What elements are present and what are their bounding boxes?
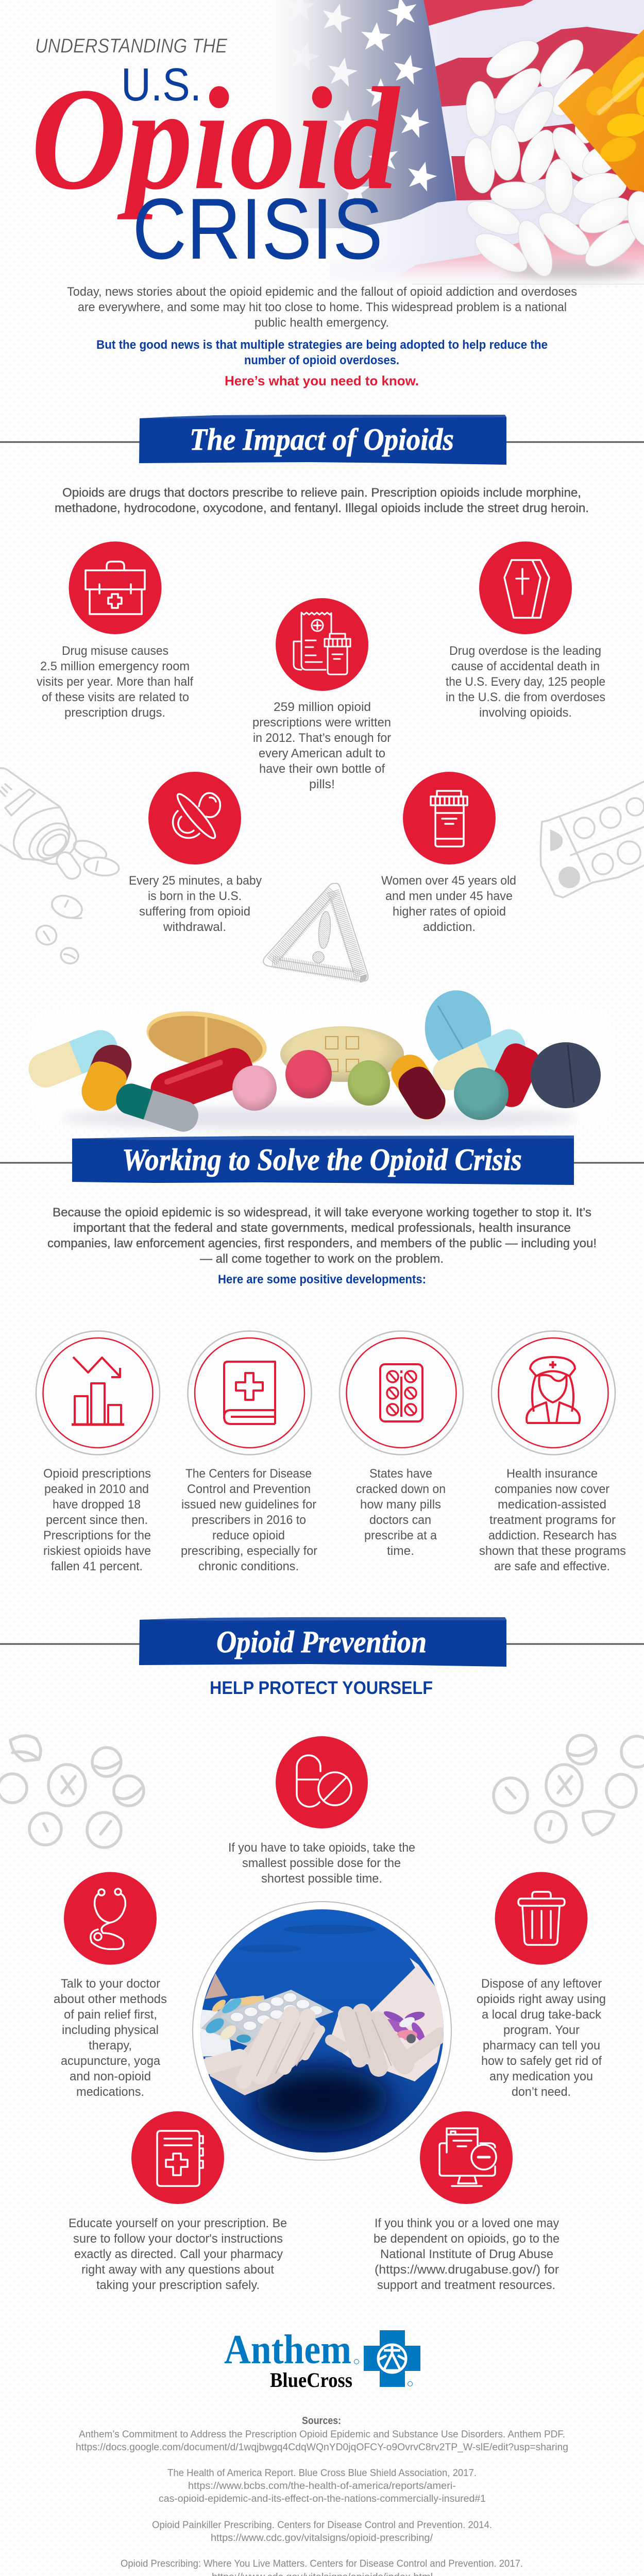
- text: insurance coverage: Health insurance: [506, 1467, 598, 1481]
- subheading: help protect yourself: HELP PROTECT YOURSELF: [210, 1678, 433, 1698]
- text: state limits: prescribe at a: [364, 1529, 437, 1543]
- intro text: number of opioid overdoses.: [244, 353, 399, 367]
- tip: smallest dose: [228, 1736, 415, 1886]
- blue tablet: [420, 986, 496, 1074]
- text: overdose deaths: involving opioids.: [479, 706, 572, 720]
- text: dependence resources: If you think you or a loved one may: [375, 2216, 559, 2230]
- sources: [36, 2415, 607, 2576]
- text: state limits: States have: [369, 1467, 432, 1481]
- sources: Opioid Prescribing: Where You Live Matters. Centers for Disease Control and Prevention. 2017.: [121, 2558, 523, 2569]
- text: babies born in withdrawal: suffering from opioid: [139, 905, 250, 919]
- text: CDC guidelines: The Centers for Disease: [185, 1467, 312, 1481]
- development: state limits: [340, 1331, 463, 1558]
- text: dispose of leftovers: a local drug take-back: [482, 2008, 602, 2022]
- text: talk to your doctor: about other methods: [54, 1992, 167, 2006]
- section banner: working to solve: Working to Solve the Opioid Crisis: [122, 1143, 522, 1177]
- text: age groups: [381, 874, 516, 934]
- tip: talk to your doctor: [54, 1872, 167, 2099]
- centre photo: gloved hands holding pills: [193, 1902, 451, 2160]
- text: dependence resources: National Institute of Drug Abuse: [380, 2247, 553, 2261]
- text: dependence resources: be dependent on opioids, go to the: [374, 2232, 560, 2246]
- text: prescriptions written: 259 million opioid: [274, 700, 371, 714]
- tip: dispose of leftovers: [477, 1872, 606, 2099]
- text: insurance coverage: addiction. Research has: [488, 1529, 617, 1543]
- text: dispose of leftovers: [477, 1977, 606, 2099]
- icon: prescription and bottle: [276, 598, 368, 691]
- text: prescriptions written: [252, 700, 391, 791]
- tip: educate yourself: [69, 2111, 287, 2292]
- text: overdose deaths: cause of accidental death in: [451, 659, 600, 673]
- stat: overdose deaths: [446, 541, 605, 720]
- text: educate yourself: [69, 2216, 287, 2292]
- maroon and yellow capsule: [76, 1039, 138, 1116]
- text: talk to your doctor: including physical: [62, 2023, 159, 2037]
- intro text: Today, news stories about the opioid epidemic and the fallout of opioid addiction and overdoses: [67, 285, 577, 299]
- doodle: spilled pill bottle: [0, 768, 120, 965]
- text: state limits: doctors can: [369, 1513, 431, 1527]
- title line: CRISIS: CRISIS: [132, 180, 383, 277]
- impact intro text: methadone, hydrocodone, oxycodone, and fentanyl. Illegal opioids include the street drug heroin.: [55, 501, 589, 515]
- solve intro text: Because the opioid epidemic is so widespread, it will take everyone working together to stop it. It’s: [53, 1206, 591, 1219]
- solve intro text: companies, law enforcement agencies, first responders, and members of the public — including you!: [47, 1236, 597, 1250]
- big tan tablet: [142, 1003, 271, 1077]
- text: babies born in withdrawal: withdrawal.: [163, 920, 226, 934]
- text: talk to your doctor: of pain relief first,: [64, 2008, 157, 2022]
- text: prescriptions written: pills!: [309, 777, 335, 791]
- intro text: But the good news is that multiple strategies are being adopted to help reduce the: [96, 338, 548, 352]
- text: prescriptions dropped: percent since then.: [46, 1513, 148, 1527]
- sources: The Health of America Report. Blue Cross Blue Shield Association, 2017.: [167, 2468, 477, 2479]
- text: prescriptions dropped: riskiest opioids have: [43, 1544, 151, 1558]
- text: prescriptions written: in 2012. That’s enough for: [253, 731, 391, 745]
- sources: Anthem’s Commitment to Address the Prescription Opioid Epidemic and Substance Use Disorders. Anthem PDF.: [79, 2429, 565, 2440]
- icon: stethoscope: [64, 1872, 157, 1965]
- section banner: the impact of opioids: [0, 415, 644, 465]
- section banner: opioid prevention: [0, 1617, 644, 1667]
- blister pack, front: [230, 1990, 334, 2039]
- text: dispose of leftovers: any medication you: [489, 2070, 593, 2083]
- sources: Opioid Painkiller Prescribing. Centers for Disease Control and Prevention. 2014.: [152, 2520, 492, 2531]
- logo: Anthem Blue Cross: BlueCross: [270, 2368, 352, 2392]
- text: CDC guidelines: reduce opioid: [212, 1529, 285, 1543]
- text: CDC guidelines: chronic conditions.: [198, 1560, 299, 1573]
- icon: falling bar chart: [36, 1331, 160, 1455]
- text: educate yourself: exactly as directed. Call your pharmacy: [74, 2247, 283, 2261]
- text: insurance coverage: companies now cover: [495, 1482, 609, 1496]
- intro text: Here’s what you need to know.: [225, 373, 419, 388]
- text: dependence resources: (https://www.drugabuse.gov/) for: [375, 2263, 559, 2277]
- text: prescriptions written: every American adult to: [259, 747, 385, 760]
- icon: pacifier: [148, 772, 241, 865]
- icon: capsule and tablet: [276, 1736, 368, 1828]
- blister pack, back: [201, 1994, 268, 2047]
- stat: age groups: [381, 772, 516, 934]
- tip: dependence resources: [374, 2111, 560, 2292]
- text: educate yourself: right away with any questions about: [81, 2263, 274, 2277]
- solve intro text: — all come together to work on the problem.: [200, 1252, 444, 1266]
- teal and grey capsule: [112, 1080, 202, 1136]
- title: [31, 35, 401, 277]
- text: CDC guidelines: prescribers in 2016 to: [192, 1513, 306, 1527]
- icon: pill bottle: [403, 772, 496, 865]
- text: talk to your doctor: therapy,: [89, 2039, 132, 2053]
- text: overdose deaths: [446, 644, 605, 720]
- text: insurance coverage: treatment programs for: [489, 1513, 616, 1527]
- cream and cyan capsule, right: [428, 1024, 531, 1095]
- text: age groups: Women over 45 years old: [381, 874, 516, 888]
- sources: Sources:: [302, 2415, 341, 2427]
- stat: drug misuse: [37, 541, 193, 720]
- text: talk to your doctor: and non-opioid: [70, 2070, 151, 2083]
- text: state limits: time.: [387, 1544, 414, 1558]
- text: talk to your doctor: medications.: [76, 2085, 144, 2099]
- text: drug misuse: of these visits are related to: [42, 690, 189, 704]
- stat: babies born in withdrawal: [129, 772, 262, 934]
- cream and cyan capsule, left: [24, 1025, 123, 1092]
- yellow and maroon capsule: [385, 1048, 452, 1126]
- development: CDC guidelines: [181, 1331, 317, 1573]
- text: state limits: cracked down on: [356, 1482, 446, 1496]
- solve intro text: Here are some positive developments:: [218, 1273, 426, 1286]
- intro text: [67, 285, 577, 388]
- text: drug misuse: 2.5 million emergency room: [40, 659, 190, 673]
- text: dispose of leftovers: opioids right away using: [477, 1992, 606, 2006]
- text: smallest dose: If you have to take opioids, take the: [228, 1841, 415, 1855]
- text: insurance coverage: are safe and effective.: [494, 1560, 610, 1573]
- logo: Anthem Blue Cross: [224, 2327, 420, 2392]
- intro text: public health emergency.: [255, 316, 389, 330]
- text: state limits: how many pills: [360, 1498, 441, 1512]
- text: babies born in withdrawal: is born in the U.S.: [148, 889, 242, 903]
- doodle: warning triangle: [263, 884, 368, 981]
- text: dependence resources: support and treatment resources.: [377, 2278, 555, 2292]
- text: drug misuse: visits per year. More than half: [37, 675, 193, 689]
- icon: medical book: [188, 1331, 311, 1455]
- text: drug misuse: [37, 644, 193, 720]
- sources: https://www.bcbs.com/the-health-of-america/reports/ameri-: [188, 2481, 456, 2492]
- text: babies born in withdrawal: [129, 874, 262, 934]
- text: educate yourself: Educate yourself on your prescription. Be: [69, 2216, 287, 2230]
- text: dispose of leftovers: program. Your: [503, 2023, 580, 2037]
- impact intro text: Opioids are drugs that doctors prescribe to relieve pain. Prescription opioids include morphine,: [62, 486, 581, 500]
- orange prescription bottle: [558, 29, 644, 192]
- text: state limits: [356, 1467, 446, 1558]
- text: dispose of leftovers: don’t need.: [512, 2085, 571, 2099]
- right gloved hand: [329, 1964, 444, 2081]
- solve intro text: important that the federal and state governments, medical professionals, health insurance: [73, 1221, 571, 1235]
- text: prescriptions dropped: Opioid prescriptions: [43, 1467, 151, 1481]
- text: CDC guidelines: Control and Prevention: [187, 1482, 311, 1496]
- cream tablet: [280, 1026, 404, 1082]
- development: insurance coverage: [479, 1331, 626, 1573]
- text: CDC guidelines: prescribing, especially for: [181, 1544, 317, 1558]
- text: dispose of leftovers: how to safely get rid of: [481, 2054, 602, 2068]
- header photo: flag and spilled pills: [273, 0, 644, 284]
- section banner: the impact of opioids: The Impact of Opioids: [190, 422, 454, 456]
- text: smallest dose: smallest possible dose for the: [242, 1856, 401, 1870]
- text: CDC guidelines: issued new guidelines for: [181, 1498, 316, 1512]
- icon: coffin: [479, 541, 572, 634]
- white oval pills: [462, 33, 644, 281]
- title line: Opioid: Opioid: [31, 57, 401, 220]
- pink tablet: [232, 1065, 277, 1111]
- text: talk to your doctor: Talk to your doctor: [61, 1977, 160, 1991]
- photo: assorted colourful pills: [24, 986, 613, 1136]
- development: prescriptions dropped: [36, 1331, 160, 1573]
- sources: https://www.cdc.gov/vitalsigns/opioid-prescribing/: [211, 2533, 433, 2544]
- text: prescriptions dropped: Prescriptions for the: [43, 1529, 151, 1543]
- icon: prescription notes with cross: [131, 2111, 224, 2204]
- logo: Anthem Blue Cross: Anthem: [224, 2327, 351, 2372]
- text: insurance coverage: [479, 1467, 626, 1573]
- text: age groups: higher rates of opioid: [393, 905, 506, 919]
- sources: cas-opioid-epidemic-and-its-effect-on-the-nations-commercially-insured#1: [159, 2494, 486, 2504]
- intro text: are everywhere, and some may hit too close to home. This widespread problem is a national: [78, 300, 567, 314]
- text: smallest dose: shortest possible time.: [261, 1872, 382, 1886]
- text: drug misuse: prescription drugs.: [64, 706, 165, 720]
- left gloved hand: [205, 2011, 324, 2095]
- text: insurance coverage: shown that these programs: [479, 1544, 626, 1558]
- text: prescriptions written: prescriptions were written: [252, 716, 391, 730]
- section banner: opioid prevention: Opioid Prevention: [216, 1625, 427, 1659]
- solve intro text: [47, 1206, 597, 1286]
- text: insurance coverage: medication-assisted: [498, 1498, 606, 1512]
- title line: understanding the: UNDERSTANDING THE: [35, 35, 228, 57]
- icon: blister pack: [340, 1331, 463, 1455]
- text: overdose deaths: the U.S. Every day, 125 people: [446, 675, 605, 689]
- title line: U.S.: U.S.: [121, 59, 201, 111]
- text: educate yourself: taking your prescription safely.: [96, 2278, 260, 2292]
- stat: prescriptions written: [252, 598, 391, 791]
- sources: https://docs.google.com/document/d/1wqjbwgq4CdqWQnYD0jqOFCY-o9OvrvC8rv2TP_W-slE/edit?usp=sharing: [76, 2442, 568, 2453]
- text: dispose of leftovers: Dispose of any leftover: [481, 1977, 602, 1991]
- red capsule: [146, 1043, 258, 1117]
- icon: computer with document: [420, 2111, 513, 2204]
- coral tablet: [285, 1050, 332, 1098]
- text: age groups: addiction.: [423, 920, 476, 934]
- text: CDC guidelines: [181, 1467, 317, 1573]
- text: drug misuse: Drug misuse causes: [62, 644, 168, 658]
- section banner: working to solve: [0, 1136, 644, 1185]
- text: prescriptions dropped: fallen 41 percent.: [51, 1560, 143, 1573]
- text: talk to your doctor: acupuncture, yoga: [61, 2054, 161, 2068]
- doodle: scattered pills, left: [0, 1736, 144, 1848]
- text: dependence resources: [374, 2216, 560, 2292]
- doodle: blister pack: [540, 782, 644, 897]
- icon: medical briefcase: [69, 541, 162, 634]
- icon: trash can: [495, 1872, 587, 1965]
- text: overdose deaths: in the U.S. die from overdoses: [446, 690, 605, 704]
- red capsule, right: [483, 1039, 544, 1111]
- impact intro text: [55, 486, 589, 515]
- text: prescriptions written: have their own bottle of: [259, 762, 385, 776]
- text: age groups: and men under 45 have: [385, 889, 513, 903]
- text: talk to your doctor: [54, 1977, 167, 2099]
- doodle: scattered pills, right: [494, 1735, 644, 1842]
- text: educate yourself: sure to follow your doctor's instructions: [73, 2232, 283, 2246]
- text: prescriptions dropped: [43, 1467, 151, 1573]
- handful of capsules: [383, 2011, 425, 2044]
- text: prescriptions dropped: peaked in 2010 and: [44, 1482, 149, 1496]
- text: dispose of leftovers: pharmacy can tell you: [483, 2039, 600, 2053]
- text: prescriptions dropped: have dropped 18: [53, 1498, 141, 1512]
- text: overdose deaths: Drug overdose is the leading: [449, 644, 601, 658]
- icon: nurse: [492, 1331, 615, 1455]
- green tablet: [348, 1060, 390, 1106]
- teal tablet: [454, 1067, 509, 1120]
- text: smallest dose: [228, 1841, 415, 1886]
- dark slate tablet: [531, 1042, 601, 1108]
- text: babies born in withdrawal: Every 25 minutes, a baby: [129, 874, 262, 888]
